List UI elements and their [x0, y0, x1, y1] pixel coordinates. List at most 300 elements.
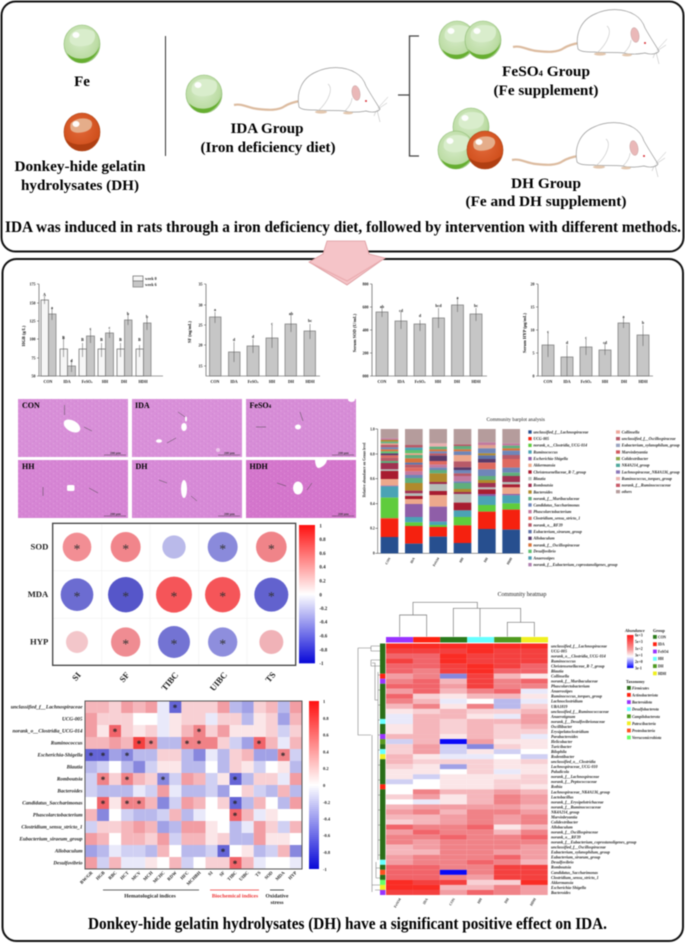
- colorbar: 0.2: [323, 766, 329, 771]
- legend: genera: unclassified_f__Oscillospiraceae: [622, 436, 676, 441]
- histology: HDH: 200 μm: [338, 512, 349, 516]
- row labels: Blautia: [66, 765, 83, 771]
- column labels: HDH: [529, 897, 537, 907]
- row labels: unclassified_f__Lachnospiraceae: [11, 705, 83, 711]
- row: HYP: *: [219, 636, 226, 651]
- bar chart: Serum HYP: b: [642, 320, 645, 325]
- bar chart: HGB: d: [70, 358, 73, 363]
- column labels: BW/GR: [79, 870, 94, 885]
- bar chart: SF: FeSO4: [248, 379, 259, 384]
- bar chart: HGB: B: [119, 337, 122, 342]
- bar chart: HGB: HGB (g/L): [21, 325, 26, 346]
- row labels: Collinsella: [551, 674, 569, 679]
- label: FeSO4 group: FeSO 4 Group: [502, 64, 590, 80]
- histology: FeSO4: FeSO4: [250, 401, 272, 410]
- bar chart: Serum HYP: c: [585, 335, 587, 340]
- legend: abundance: 2e+0: [635, 660, 643, 664]
- legend: genera: Lachnospiraceae_NK4A136_group: [621, 469, 680, 474]
- y axis: 0.8: [370, 452, 375, 456]
- column labels: HGB: [95, 870, 106, 881]
- group: biochemical indices: [210, 890, 259, 900]
- colorbar: -1: [319, 662, 324, 667]
- legend: group: CON: [658, 635, 666, 639]
- histology: DH: DH: [136, 462, 148, 471]
- row labels: MDA: [28, 589, 49, 599]
- row labels: UBA1819: [551, 704, 567, 709]
- row: MDA: *: [74, 589, 81, 604]
- significance stars: *: [101, 751, 106, 761]
- bar chart: Serum SOD: HDH: [471, 379, 481, 384]
- row labels: Bacteroides: [56, 789, 82, 795]
- bar chart: HGB: 75: [32, 356, 36, 360]
- column labels: TS: [263, 670, 278, 684]
- significance stars: *: [221, 847, 226, 857]
- bar chart: HGB: b: [127, 311, 130, 316]
- bar chart: Serum SOD: 800: [362, 282, 368, 286]
- significance stars: *: [113, 727, 118, 737]
- row labels: Phascolarctobacterium: [33, 813, 82, 819]
- legend: genera: Eubacterium_siraeum_group: [532, 529, 582, 534]
- row labels: Bilophila: [550, 749, 567, 754]
- row labels: Ruminococcus_torques_group: [551, 694, 602, 699]
- row labels: Lachnospiraceae_NK4A136_group: [550, 789, 610, 794]
- significance stars: *: [197, 727, 202, 737]
- row labels: norank_f__Eubacterium_coprostanoligenes_group: [551, 840, 636, 845]
- row labels: Parabacteroides: [551, 734, 578, 739]
- legend: group: FeSO4: [658, 650, 669, 654]
- heatmap cells: [386, 644, 548, 895]
- significance stars: *: [185, 739, 190, 749]
- row: MDA: *: [219, 589, 226, 604]
- bar chart: Serum HYP: Serum HYP (μg/mL): [522, 312, 527, 353]
- bar chart: Serum SOD: 000: [362, 374, 368, 378]
- row: SOD: [63, 532, 287, 562]
- legend: genera: norank_o__Clostridia_UCG-014: [533, 443, 587, 448]
- row: MDA: *: [268, 589, 275, 604]
- histology: HDH: HDH: [250, 462, 268, 471]
- significance stars: *: [149, 739, 154, 749]
- column labels: CON: [448, 897, 456, 906]
- bar chart: SF: 30: [198, 302, 202, 308]
- row labels: norank_f__Oscillospiraceae: [551, 830, 598, 835]
- row labels: Phascolarctobacterium: [551, 684, 590, 689]
- row labels: Candidatus_Saccharimonas: [22, 801, 82, 807]
- x labels: HH: [458, 556, 465, 563]
- histology: CON: [18, 399, 128, 457]
- y axis: [362, 427, 523, 556]
- significance stars: *: [89, 751, 94, 761]
- stacked bars: [389, 429, 511, 553]
- histology: HH: HH: [22, 462, 35, 471]
- bar chart: HGB: A: [43, 292, 46, 297]
- legend: abundance: 3e-1: [635, 666, 642, 670]
- colorbar: -0.4: [323, 816, 331, 822]
- legend: genera: Allobaculum: [532, 536, 555, 541]
- row labels: Lachnospiraceae_UCG-010: [550, 764, 598, 769]
- label: Donkey-hide gelatin hydrolysates: hydrolysates (DH): [21, 178, 139, 194]
- row labels: Clostridium_sensu_stricto_1: [21, 825, 83, 831]
- label: IDA group: IDA Group: [230, 121, 304, 137]
- legend: group: HH: [658, 657, 664, 661]
- legend: genera: Christensenellaceae_R-7_group: [533, 469, 586, 474]
- bar chart: Serum SOD: bc: [474, 303, 478, 308]
- histology: FeSO4: 200 μm: [338, 451, 349, 455]
- legend: genera: norank_f__Muribaculaceae: [533, 496, 580, 501]
- histology: IDA: [132, 399, 242, 457]
- bar chart: SF: IDA: [230, 379, 238, 384]
- divider: [164, 36, 166, 156]
- legend: group: HDH: [658, 672, 666, 676]
- row labels: [550, 643, 636, 895]
- icon: DH rat: [512, 123, 666, 177]
- bar chart: Serum HYP: 20: [530, 282, 534, 286]
- heatmap cells: [85, 701, 302, 869]
- row labels: unclassified_f__Oscillospiraceae: [551, 845, 606, 850]
- legend: genera: Bacteroides: [532, 489, 553, 494]
- legend: group: IDA: [658, 643, 665, 647]
- legend: genera: Ruminococcus: [533, 449, 558, 454]
- row labels: Clostridium_sensu_stricto_1: [551, 875, 599, 880]
- bar chart: SF: CON: [211, 379, 220, 384]
- row labels: Anaerostipes: [550, 689, 573, 694]
- bar chart: HGB: B: [138, 337, 141, 342]
- caption: conclusion: Donkey-hide gelatin hydrolysates (DH) have a significant positive effect on IDA.: [88, 914, 607, 933]
- row labels: norank_f__Ruminococcaceae: [551, 804, 601, 809]
- colorbar: 0.4: [323, 750, 329, 754]
- colorbar: [309, 699, 331, 872]
- chart: correlation bubble matrix: [28, 523, 328, 693]
- column labels: SF: [117, 670, 131, 684]
- column labels: [79, 870, 298, 886]
- label: FeSO4 group: [494, 64, 599, 99]
- label: DH group: DH Group: [511, 176, 581, 192]
- column labels: [70, 670, 278, 693]
- legend: genera: unclassified_f__Lachnospiraceae: [533, 429, 589, 434]
- bar chart: Serum HYP: [522, 282, 653, 384]
- bar chart: SF: d: [233, 337, 236, 342]
- row labels: Romboutsia: [57, 777, 83, 783]
- bar chart: HGB: b: [146, 314, 149, 319]
- column labels: SI: [70, 670, 83, 683]
- row labels: norank_f__Lachnospiraceae: [551, 774, 599, 779]
- row labels: norank_o__Clostridia_UCG-014: [551, 653, 606, 658]
- row labels: Rothia: [551, 784, 562, 789]
- bar chart: Serum HYP: HH: [602, 379, 609, 384]
- row labels: Marvinbryantia: [550, 814, 577, 819]
- row labels: NK4A214_group: [550, 809, 579, 814]
- legend: genera: Phascolarctobacterium: [533, 509, 571, 514]
- bar chart: SF: HH: [269, 379, 276, 384]
- colorbar: 0.8: [319, 538, 326, 543]
- legend: genera: Marvinbryantia: [621, 449, 648, 454]
- row labels: [11, 705, 83, 867]
- legend: genera: Ruminococcus_torques_group: [622, 476, 672, 481]
- label: DH group: (Fe and DH supplement): [466, 194, 627, 210]
- row: MDA: *: [122, 589, 129, 604]
- row labels: norank_o__RF39: [551, 835, 581, 840]
- y axis: 0.6: [370, 477, 375, 481]
- colorbar: 0.2: [319, 579, 326, 584]
- legend: genera: norank_o__RF39: [533, 522, 563, 527]
- label: IDA group: [200, 121, 336, 156]
- bar chart: HGB: FeSO4: [82, 379, 93, 384]
- colorbar: -0.8: [319, 648, 328, 653]
- histology panels: [18, 397, 356, 518]
- label: Donkey-hide gelatin hydrolysates: [14, 159, 146, 194]
- column labels: HFC: [179, 870, 190, 881]
- column labels: MCHC: [152, 870, 166, 884]
- legend: genera: Anaerostipes: [532, 555, 555, 560]
- significance stars: *: [125, 799, 130, 809]
- legend: abundance: [624, 628, 645, 670]
- significance stars: *: [101, 799, 106, 809]
- colorbar: -0.8: [323, 850, 331, 855]
- legend: genera: [528, 429, 680, 567]
- column labels: SI: [207, 870, 214, 877]
- bar chart: Serum HYP: c: [547, 329, 549, 334]
- row labels: Helicobacter: [550, 739, 573, 744]
- legend: taxonomy: Actinobacteriota: [631, 694, 658, 698]
- bar chart: Serum HYP: CON: [544, 379, 553, 384]
- bar chart: Serum HYP: d: [566, 340, 569, 345]
- colorbar: 0.6: [319, 552, 326, 557]
- row labels: Escherichia-Shigella: [550, 885, 586, 890]
- legend: genera: UCG-005: [533, 436, 549, 441]
- significance stars: *: [137, 739, 142, 749]
- row labels: Anaerotignum: [550, 714, 575, 719]
- legend: genera: Escherichia-Shigella: [532, 456, 568, 461]
- row labels: Escherichia-Shigella: [37, 753, 83, 759]
- bar chart: HGB: IDA: [63, 379, 71, 384]
- bar chart: Serum SOD: ab: [380, 304, 385, 309]
- bar chart: HGB: 100: [30, 336, 36, 342]
- bar chart: HGB: 150: [30, 300, 36, 306]
- group: oxidative stress: [266, 890, 289, 906]
- column labels: MDA: [274, 870, 286, 881]
- icon: Fe ball: [64, 25, 100, 63]
- bar chart: SF: HDH: [305, 379, 315, 384]
- bar chart: Serum HYP: HDH: [638, 379, 648, 384]
- legend: group: [653, 628, 669, 676]
- icon: DH ball: [64, 113, 100, 151]
- legend: genera: norank_f__Eubacterium_coprostanoligenes_group: [533, 562, 617, 567]
- legend: weeks: week 6: [145, 282, 157, 287]
- icon: IDA ball: [186, 75, 222, 113]
- bar chart: HGB: 125: [30, 318, 36, 324]
- legend: taxonomy: Bacteroidota: [631, 701, 652, 705]
- row labels: Lachnoclostridium: [550, 699, 583, 704]
- legend: abundance: 1e+2: [635, 647, 643, 651]
- matrix frame and grid: [53, 523, 296, 665]
- bar chart: SF: 15: [198, 364, 202, 368]
- column labels: UIBC: [238, 870, 250, 882]
- row labels: Erysipelatoclostridium: [550, 729, 589, 734]
- legend: taxonomy: Firmicutes: [632, 686, 650, 690]
- bar chart: Serum HYP: DH: [621, 379, 628, 384]
- bracket: [398, 36, 419, 156]
- legend: genera: Romboutsia: [533, 483, 553, 488]
- bar chart: Serum SOD: 200: [362, 350, 368, 356]
- row: HYP: *: [171, 636, 178, 651]
- legend: genera: Desulfovibrio: [532, 549, 556, 554]
- bar chart: SF: bc: [308, 318, 312, 323]
- colorbar: -0.6: [323, 833, 331, 838]
- bar chart: HGB: HDH: [138, 379, 148, 384]
- column labels: MCHBH: [186, 870, 202, 886]
- bar chart: Serum SOD: HH: [435, 379, 442, 384]
- y axis: 0.2: [370, 527, 375, 531]
- bar chart: Serum HYP: a: [622, 314, 624, 319]
- histology: HH: 200 μm: [110, 512, 121, 516]
- histology: HH: [18, 460, 128, 518]
- legend: group: DH: [658, 664, 664, 668]
- row labels: SOD: [31, 541, 48, 551]
- significance stars: *: [257, 739, 262, 749]
- legend: genera: Akkermansia: [532, 463, 555, 468]
- bar chart: Serum SOD: cd: [399, 308, 404, 313]
- y axis: 0.4: [370, 502, 375, 506]
- legend: taxonomy: [626, 679, 661, 740]
- row labels: Bacteroides: [550, 890, 571, 895]
- histology: DH: 200 μm: [224, 512, 235, 516]
- column labels: HYP: [287, 870, 298, 881]
- row: MDA: [61, 577, 288, 613]
- icon: IDA rat: [234, 68, 388, 122]
- colorbar: 0.4: [319, 566, 326, 571]
- row labels: Candidatus_Saccharimonas: [551, 870, 598, 875]
- legend: group: Group: [653, 628, 665, 633]
- bar chart: Serum SOD: IDA: [397, 379, 405, 384]
- y axis: Relative abundance on Genus level: [362, 443, 366, 497]
- histology: CON: CON: [22, 401, 40, 410]
- colorbar: 1: [319, 524, 322, 529]
- legend: genera: NK4A214_group: [621, 463, 650, 468]
- colorbar: 0.6: [323, 732, 329, 738]
- row labels: Colidextribacter: [551, 819, 578, 824]
- label: Fe: Fe: [74, 74, 90, 90]
- arrow: [309, 241, 385, 285]
- bar chart: Serum HYP: 15: [530, 304, 534, 310]
- row labels: Ruminococcus: [551, 658, 576, 663]
- y axis: 1.0: [370, 427, 375, 431]
- bar chart: Serum SOD: FeSO4: [415, 379, 426, 384]
- row labels: Oscillibacter: [551, 724, 573, 729]
- significance stars: *: [281, 751, 286, 761]
- row labels: Rodentibacter: [551, 754, 575, 759]
- colorbar: 1: [323, 699, 326, 704]
- x labels: CON: [384, 556, 392, 565]
- row dendrogram: [358, 646, 380, 892]
- colorbar: 0: [323, 783, 326, 788]
- group: biochemical indices: Biochemical indices: [212, 894, 258, 900]
- colorbar: -0.4: [319, 621, 328, 626]
- row labels: HYP: [30, 637, 49, 647]
- x labels: FeSO4: [432, 557, 440, 567]
- y axis: 0: [373, 552, 375, 556]
- row: MDA: *: [171, 589, 178, 604]
- row: HYP: [66, 626, 283, 658]
- group: oxidative stress: Oxidative: [266, 894, 289, 900]
- row labels: Paludicola: [551, 769, 569, 774]
- column labels: TIBC: [226, 870, 238, 882]
- row labels: Akkermansia: [550, 880, 573, 885]
- legend: genera: Candidatus_Saccharimonas: [533, 502, 580, 507]
- significance stars: [89, 703, 286, 869]
- group: hematological indices: Hematological indices: [124, 894, 176, 900]
- x labels: HDH: [506, 556, 513, 565]
- column labels: RBC: [107, 870, 118, 881]
- colorbar: 0: [319, 593, 322, 598]
- row labels: norank_o__Clostridia_UCG-014: [12, 729, 83, 735]
- row: SOD: *: [122, 541, 129, 556]
- column labels: TS: [254, 870, 262, 878]
- histology: DH: [132, 460, 242, 518]
- column labels: HH: [477, 897, 483, 904]
- taxonomy strip: [380, 644, 385, 895]
- bar chart: SF: 20: [198, 342, 202, 348]
- icon: DH balls: [438, 108, 503, 169]
- bar chart: Serum SOD: 600: [362, 304, 368, 310]
- histology: FeSO4: [246, 397, 356, 457]
- legend: taxonomy: Verrucomicrobiota: [632, 736, 661, 740]
- column labels: FeSO4: [393, 897, 402, 908]
- significance stars: *: [233, 799, 238, 809]
- bar chart: Serum SOD: a: [456, 295, 458, 300]
- significance stars: *: [101, 775, 106, 785]
- bar chart: HGB: 175: [30, 282, 36, 286]
- column labels: DH: [504, 897, 510, 904]
- legend: weeks: week 0: [145, 276, 157, 281]
- significance stars: *: [137, 799, 142, 809]
- legend: genera: others: [622, 489, 632, 494]
- column labels: SF: [218, 870, 226, 878]
- row labels: unclassified_f__Ruminococcaceae: [551, 709, 609, 714]
- significance stars: *: [161, 775, 166, 785]
- legend: genera: Clostridium_sensu_stricto_1: [533, 516, 580, 521]
- x labels: IDA: [409, 556, 416, 564]
- row labels: UCG-005: [551, 648, 567, 653]
- legend: taxonomy: Campilobacterota: [632, 715, 660, 719]
- icon: FeSO4 balls: [439, 21, 501, 59]
- legend: genera: Colidextribacter: [622, 456, 649, 461]
- chart: genus vs indices heatmap: [11, 699, 331, 906]
- column labels: [393, 897, 537, 908]
- bar chart: HGB: B: [81, 337, 84, 342]
- bar chart: Serum SOD: 400: [362, 328, 368, 332]
- legend: abundance: 3e+1: [635, 654, 643, 658]
- bar chart: Serum HYP: cd: [603, 340, 608, 345]
- row labels: Eubacterium_siraeum_group: [550, 855, 600, 860]
- legend: weeks: [133, 276, 157, 287]
- row labels: Turicibacter: [551, 744, 572, 749]
- histology: CON: 200 μm: [110, 451, 121, 455]
- colorbar: [299, 524, 328, 667]
- label: DH group: [466, 176, 627, 210]
- column labels: RDW: [166, 870, 178, 882]
- row labels: Allobaculum: [54, 849, 82, 855]
- bar chart: HGB: c: [90, 326, 92, 331]
- bar chart: HGB: B: [62, 335, 65, 340]
- chart title: Community heatmap: [498, 592, 546, 598]
- colorbar: -0.6: [319, 635, 328, 640]
- bar chart: HGB: 50: [32, 374, 36, 378]
- colorbar: -0.2: [319, 607, 328, 612]
- significance stars: *: [233, 811, 238, 821]
- histology: HDH: [246, 460, 356, 518]
- row: SOD: *: [219, 541, 226, 556]
- panel: results: [2, 259, 683, 941]
- significance stars: *: [233, 775, 238, 785]
